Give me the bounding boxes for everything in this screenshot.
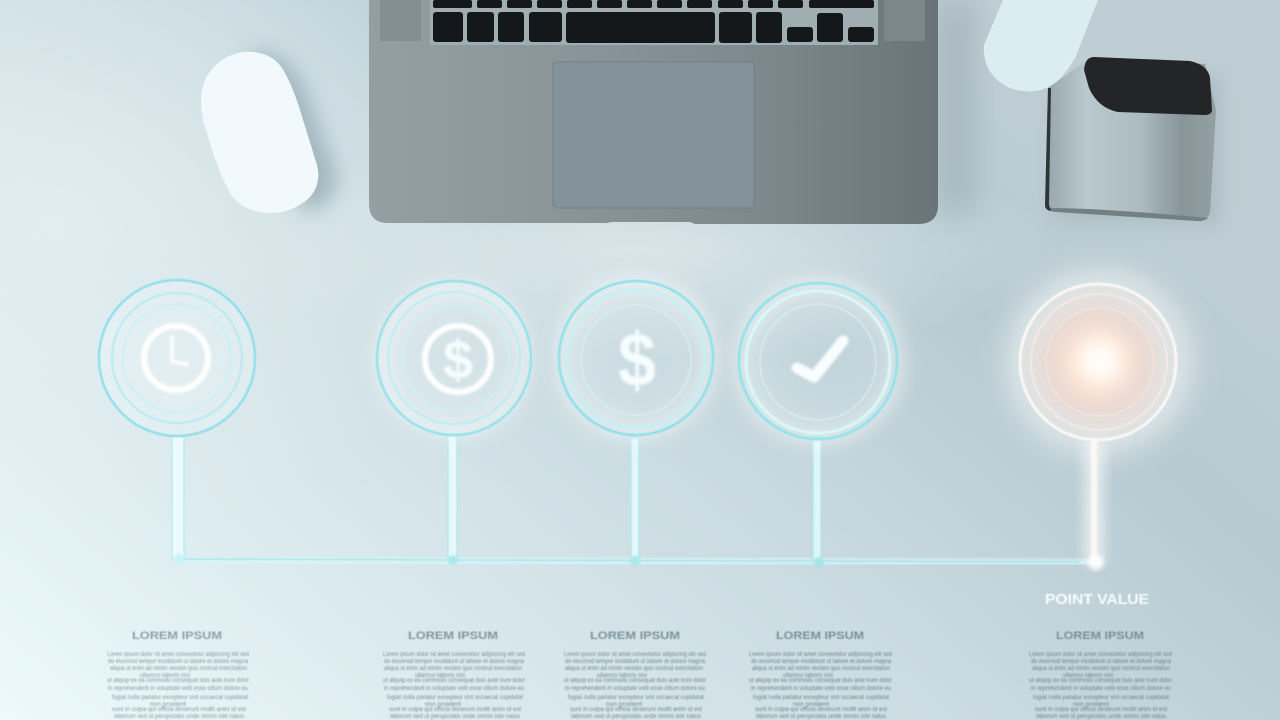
heading 4: LOREM IPSUM	[776, 630, 864, 642]
horizontal line glow	[178, 559, 1097, 563]
body text 5: fugiat nulla pariatur excepteur sint occaecat cupidatat	[1033, 694, 1169, 701]
body text 2: ut aliquip ex ea commodo consequat duis aute irure dolor	[383, 677, 526, 684]
text column 5	[1029, 630, 1173, 720]
core glow	[1078, 339, 1122, 383]
mouse shadow	[250, 50, 338, 213]
body text 2: non proident	[425, 701, 461, 708]
node 5: glowing final value	[1005, 268, 1193, 456]
body text 1: in reprehenderit in voluptate velit esse cillum dolore eu	[108, 685, 248, 692]
cup left edge	[1045, 88, 1051, 211]
body text 4: ullamco laboris nisi	[783, 672, 833, 679]
body text 5: aliqua ut enim ad minim veniam quis nostrud exercitation	[1032, 665, 1170, 672]
stem 1	[172, 436, 184, 564]
trackpad	[553, 62, 754, 208]
cup shadow	[1054, 74, 1220, 224]
body text 5: Lorem ipsum dolor sit amet consectetur adipiscing elit sed	[1029, 651, 1172, 658]
body text 3	[564, 651, 707, 720]
speaker grille right	[884, 0, 925, 41]
body text 3: Lorem ipsum dolor sit amet consectetur adipiscing elit sed	[564, 651, 706, 658]
horizontal line	[178, 559, 1080, 562]
body text 1: do eiusmod tempor incididunt ut labore et dolore magna	[108, 658, 248, 665]
body text 2: do eiusmod tempor incididunt ut labore et dolore magna	[384, 658, 524, 665]
mouse	[201, 50, 338, 213]
body text 3: aliqua ut enim ad minim veniam quis nostrud exercitation	[565, 665, 703, 672]
body text 1: fugiat nulla pariatur excepteur sint occaecat cupidatat	[112, 694, 248, 701]
text column 1	[107, 630, 250, 720]
body text 4: sunt in culpa qui officia deserunt mollit anim id est	[755, 706, 887, 713]
node 1: clock	[99, 280, 255, 436]
cup bottom band	[1050, 208, 1208, 221]
body text 1: Lorem ipsum dolor sit amet consectetur adipiscing elit sed	[107, 651, 249, 658]
laptop body	[369, 0, 938, 224]
icon: clock	[144, 326, 208, 390]
body text 2: in reprehenderit in voluptate velit esse cillum dolore eu	[384, 685, 524, 692]
laptop	[369, 0, 976, 224]
body text 3: do eiusmod tempor incididunt ut labore et dolore magna	[565, 658, 705, 665]
body text 5	[1029, 651, 1173, 720]
body text 3: laborum sed ut perspiciatis unde omnis iste natus	[571, 713, 702, 720]
body text 2: fugiat nulla pariatur excepteur sint occaecat cupidatat	[387, 694, 523, 701]
cup holder	[1045, 57, 1220, 224]
body text 3: in reprehenderit in voluptate velit esse cillum dolore eu	[565, 685, 705, 692]
heading 1: LOREM IPSUM	[132, 630, 222, 642]
body text 2	[383, 651, 526, 720]
body text 3: sunt in culpa qui officia deserunt mollit anim id est	[570, 706, 702, 713]
body text 4: non proident	[793, 701, 829, 708]
keyboard well	[430, 0, 878, 45]
body text 4: in reprehenderit in voluptate velit esse cillum dolore eu	[751, 685, 891, 692]
body text 2: aliqua ut enim ad minim veniam quis nostrud exercitation	[384, 665, 522, 672]
body text 1: aliqua ut enim ad minim veniam quis nostrud exercitation	[110, 665, 247, 672]
stem 2	[448, 436, 458, 565]
node 4: check	[723, 267, 915, 455]
body text 4: fugiat nulla pariatur excepteur sint occaecat cupidatat	[753, 694, 889, 701]
body text 1: ullamco laboris nisi	[140, 672, 190, 679]
body text 5: do eiusmod tempor incididunt ut labore et dolore magna	[1031, 658, 1171, 665]
icon: coin with dollar sign: $	[443, 330, 473, 390]
body text 4	[749, 651, 893, 720]
body text 5: ut aliquip ex ea commodo consequat duis aute irure dolor	[1029, 677, 1173, 684]
heading 5: LOREM IPSUM	[1056, 630, 1144, 642]
body text 2: ullamco laboris nisi	[415, 672, 465, 679]
body text 4: laborum sed ut perspiciatis unde omnis iste natus	[756, 713, 887, 720]
body text 5: in reprehenderit in voluptate velit esse cillum dolore eu	[1031, 685, 1171, 692]
heading 3: LOREM IPSUM	[590, 630, 680, 642]
body text 2: sunt in culpa qui officia deserunt mollit anim id est	[389, 706, 521, 713]
body text 4: do eiusmod tempor incididunt ut labore et dolore magna	[751, 658, 891, 665]
stem 3	[630, 438, 640, 566]
body text 5: ullamco laboris nisi	[1063, 672, 1113, 679]
keyboard keys	[433, 0, 874, 43]
body text 2: laborum sed ut perspiciatis unde omnis iste natus	[390, 713, 521, 720]
body text 2: Lorem ipsum dolor sit amet consectetur adipiscing elit sed	[383, 651, 525, 658]
body text 3: ullamco laboris nisi	[597, 672, 647, 679]
body text 5: non proident	[1073, 701, 1109, 708]
icon: check mark	[797, 341, 843, 377]
speaker grille left	[380, 0, 421, 41]
node 2: coin dollar	[366, 271, 542, 447]
icon: dollar sign: $	[618, 318, 656, 403]
stem 5 warm	[1084, 440, 1104, 570]
laptop shadow	[936, 0, 976, 215]
body text 3: ut aliquip ex ea commodo consequat duis aute irure dolor	[564, 677, 707, 684]
body text 5: sunt in culpa qui officia deserunt mollit anim id est	[1035, 706, 1167, 713]
body text 1	[107, 651, 250, 720]
body text 1: non proident	[150, 701, 186, 708]
body text 1: sunt in culpa qui officia deserunt mollit anim id est	[112, 706, 246, 713]
icon: coin with dollar sign	[425, 326, 491, 392]
text column 3	[564, 630, 707, 720]
mouse body	[201, 52, 318, 213]
body text 1: ut aliquip ex ea commodo consequat duis aute irure dolor	[107, 677, 250, 684]
body text 3: fugiat nulla pariatur excepteur sint occaecat cupidatat	[568, 694, 704, 701]
heading 2: LOREM IPSUM	[408, 630, 498, 642]
label: final value: POINT VALUE	[1045, 591, 1149, 608]
body text 1: laborum sed ut perspiciatis unde omnis iste natus	[114, 713, 245, 720]
connector timeline	[172, 436, 1104, 570]
body text 4: ut aliquip ex ea commodo consequat duis aute irure dolor	[749, 677, 893, 684]
body text 4: aliqua ut enim ad minim veniam quis nostrud exercitation	[752, 665, 890, 672]
text column 2	[383, 630, 526, 720]
node 3: dollar	[544, 266, 728, 450]
second mouse, top right	[984, 0, 1098, 92]
cup body	[1045, 58, 1216, 221]
stem 4	[813, 440, 824, 567]
text column 4	[749, 630, 893, 720]
body text 4: Lorem ipsum dolor sit amet consectetur adipiscing elit sed	[749, 651, 892, 658]
body text 3: non proident	[606, 701, 642, 708]
body text 5: laborum sed ut perspiciatis unde omnis iste natus	[1036, 713, 1167, 720]
cup opening	[1084, 57, 1212, 115]
